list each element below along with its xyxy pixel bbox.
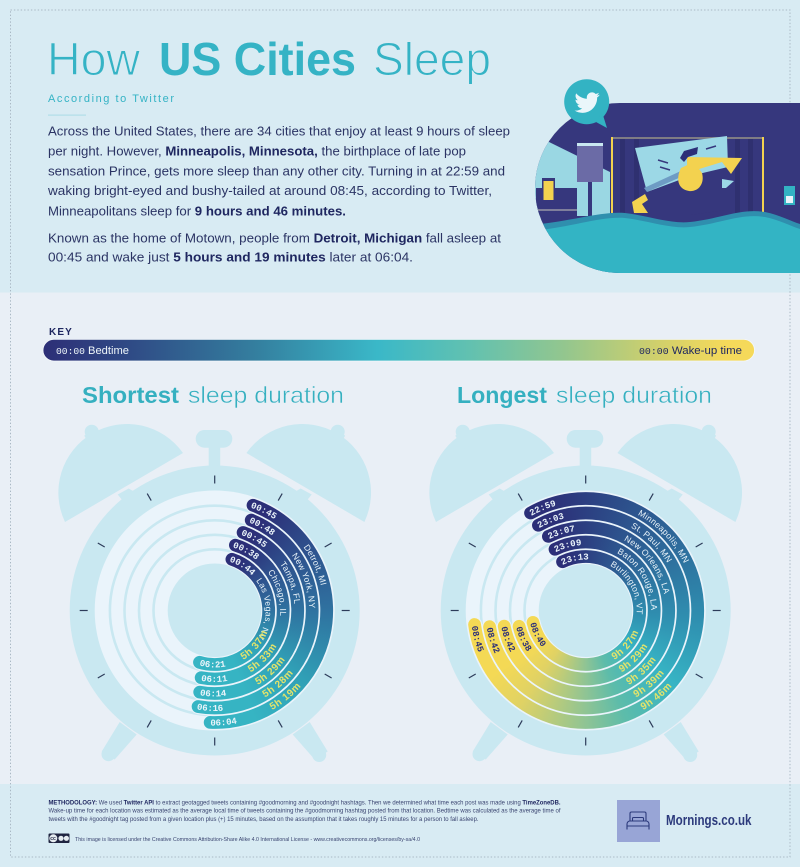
intro text block	[47, 123, 510, 264]
arc labels: longest: 23:07	[548, 525, 574, 539]
arc labels: longest: St. Paul, MN	[632, 523, 672, 562]
arc labels: shortest: Tampa, FL	[281, 560, 300, 604]
footer band	[0, 784, 800, 867]
arc labels: shortest: 00:45	[242, 530, 268, 547]
intro text block: waking bright-eyed and bushy-tailed at around 08:45, according to Twitter,	[47, 183, 492, 198]
arc labels: shortest: 06:14	[200, 690, 226, 696]
arc labels: shortest: 06:21	[200, 660, 226, 668]
arc labels: longest: 23:13	[561, 554, 588, 565]
arc labels: longest: 23:09	[554, 539, 581, 552]
arc labels: shortest: 00:44	[230, 556, 256, 575]
heading: longest sleep duration	[457, 382, 712, 408]
intro text block: per night. However, Minneapolis, Minnesota, the birthplace of late pop	[48, 143, 466, 158]
title: How	[47, 33, 141, 85]
arc labels: longest: 22:59	[530, 500, 556, 516]
arc labels: longest: New Orleans, LA	[624, 535, 670, 594]
heading: shortest sleep duration: sleep duration	[188, 382, 344, 408]
arc labels: shortest: Chicago, IL	[268, 570, 286, 616]
arc labels: shortest: Detroit, MI	[304, 544, 326, 585]
heading: shortest sleep duration: Shortest	[82, 382, 179, 408]
arc labels: longest: 08:45	[472, 626, 484, 652]
arc labels: longest: 9h 46m	[640, 684, 672, 710]
logo: mornings.co.uk: Mornings.co.uk	[666, 813, 752, 829]
subtitle: According to Twitter	[48, 93, 174, 105]
arc labels: longest: 08:40	[530, 622, 546, 646]
chart: shortest sleep clock	[58, 424, 371, 762]
logo: mornings.co.uk	[617, 800, 752, 842]
intro text block: sensation Prince, gets more sleep than any other city. Turning in at 22:59 and	[48, 163, 505, 178]
icon: twitter bubble	[564, 79, 609, 128]
arc labels: shortest: 06:11	[202, 675, 228, 682]
intro text block: Minneapolitans sleep for 9 hours and 46 minutes.	[48, 203, 346, 218]
arc labels: shortest: Las Vegas, NV	[256, 578, 271, 640]
header band	[0, 0, 800, 292]
key gradient bar: 00:00 Wake-up time	[639, 345, 742, 357]
arc labels: longest: 08:42	[502, 626, 515, 652]
arc labels: shortest: 5h 28m	[262, 670, 293, 697]
arc labels: longest: 08:38	[516, 626, 532, 651]
intro text block: Known as the home of Motown, people from Detroit, Michigan fall asleep at	[48, 230, 501, 245]
arc labels: shortest: New York, NY	[292, 552, 316, 608]
title: US Cities	[159, 33, 356, 85]
arc labels: longest: 9h 35m	[626, 658, 656, 684]
heading: longest sleep duration: Longest	[457, 382, 547, 408]
key heading: KEY	[49, 327, 73, 338]
radial gradient arcs: shortest	[192, 498, 334, 729]
heading: shortest sleep duration	[82, 382, 344, 408]
arc labels: longest: 9h 29m	[618, 644, 648, 672]
arc labels: shortest: 5h 37m	[240, 630, 268, 660]
arc labels: shortest: 00:38	[234, 542, 259, 559]
key gradient bar	[43, 339, 754, 361]
arc labels: shortest: 00:48	[250, 518, 275, 535]
title	[47, 33, 491, 85]
methodology text: tweets with the #goodnight tag posted from a given location plus (+) 15 minutes, based on the assumption that it takes roughly 15 minutes for a person to fall asleep.	[48, 816, 479, 823]
title: Sleep	[373, 33, 491, 85]
intro text block: Across the United States, there are 34 cities that enjoy at least 9 hours of sleep	[48, 123, 510, 138]
license text: This image is licensed under the Creative Commons Attribution-Share Alike 4.0 International License - www.creativecommons.org/licenses/by-sa/4.0	[75, 837, 420, 843]
arc labels: longest: Baton Rouge, LA	[618, 548, 658, 610]
methodology text: Wake-up time for each location was estimated as the average local time of tweets containing the #goodmorning hashtag posted from that location. Bedtime was calculated as the average time of	[48, 808, 561, 815]
radial gradient arcs: longest	[468, 492, 704, 729]
arc labels: longest: 08:42	[487, 628, 500, 654]
arc labels: shortest: 00:45	[252, 502, 277, 518]
arc labels: longest: Burlington, VT	[610, 561, 643, 614]
arc labels: longest: 9h 27m	[612, 630, 638, 660]
illustration: sleeping man in bed	[530, 79, 800, 275]
methodology text: METHODOLOGY: We used Twitter API to extract geotagged tweets containing #goodmorning and #goodnight hashtags. Then we determined what time each post was made using TimeZoneDB.	[48, 799, 561, 806]
key gradient bar: 00:00 Bedtime	[56, 345, 129, 357]
intro text block: 00:45 and wake just 5 hours and 19 minutes later at 06:04.	[48, 250, 413, 264]
arc labels: shortest: 06:04	[210, 718, 237, 726]
arc labels: shortest: 5h 33m	[248, 644, 276, 672]
arc labels: shortest	[198, 502, 326, 726]
arc labels: shortest: 5h 29m	[254, 658, 285, 684]
methodology text	[48, 799, 561, 823]
arc labels: longest: 23:03	[538, 513, 564, 528]
chart: longest sleep clock	[429, 424, 742, 762]
arc labels: longest: 9h 39m	[633, 670, 664, 697]
heading: longest sleep duration: sleep duration	[556, 382, 712, 408]
license badge	[48, 834, 70, 843]
arc labels: longest: Minneapolis, MN	[638, 510, 689, 563]
license badge: cc	[50, 836, 56, 842]
arc labels: longest	[472, 500, 689, 710]
arc labels: shortest: 06:16	[198, 704, 223, 711]
arc labels: shortest: 5h 19m	[269, 684, 301, 710]
